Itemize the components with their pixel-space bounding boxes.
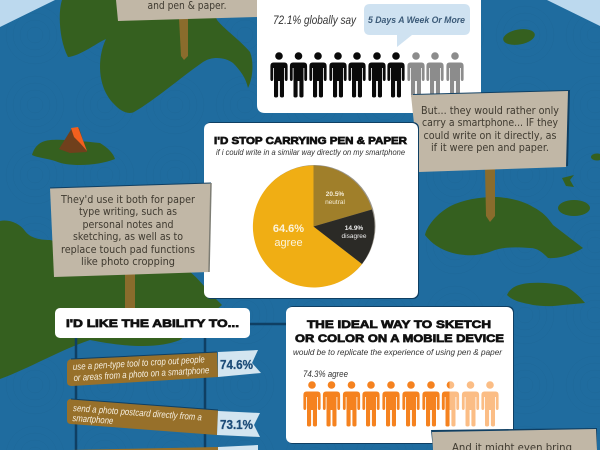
slice: disagree [314, 210, 375, 264]
panel: ideal way to sketch [286, 306, 514, 444]
sign: both uses: like photo cropping [81, 256, 175, 268]
sign: both uses: sketching, as well as to [73, 231, 183, 243]
top-left ice corner [0, 0, 55, 27]
heading panel: ability [55, 308, 250, 338]
sign post: top [179, 18, 188, 60]
sign: both uses: type writing, such as [79, 206, 177, 218]
tag: 74.6%: 74.6% [220, 357, 253, 372]
stat text: 74.3% agree [303, 369, 348, 380]
ribbon: postcard [67, 399, 218, 435]
pictogram: people [270, 52, 464, 98]
sign: both uses: personal notes and [82, 219, 174, 231]
pie labels: neutral [325, 199, 345, 206]
sign post: right [485, 168, 495, 222]
sign: top: and pen & paper. [148, 0, 226, 12]
pie labels: 20.5% [326, 191, 344, 198]
ribbon: crop: use a pen-type tool to crop out people [73, 354, 205, 373]
heading: I'D STOP CARRYING PEN & PAPER [214, 136, 408, 147]
sign: both uses: replace touch pad functions [61, 244, 195, 256]
heading: THE IDEAL WAY TO SKETCH [307, 319, 491, 331]
panel: pie chart [204, 122, 419, 299]
heading panel: ability: I'D LIKE THE ABILITY TO... [66, 318, 239, 330]
stat text: 72.1% globally say [273, 15, 357, 27]
sign: both uses: They'd use it both for paper [60, 194, 196, 206]
sign: rather carry a smartphone: if it were pen and paper. [431, 142, 549, 154]
sign: rather carry a smartphone [411, 90, 570, 172]
sign: rather carry a smartphone: could write on it directly, as [424, 130, 556, 142]
sign: bottom [431, 428, 597, 450]
sign: both uses [50, 183, 211, 277]
left continent [0, 221, 222, 379]
sign: rather carry a smartphone: But... they would rather only [421, 105, 559, 117]
ribbon: postcard: smartphone [72, 413, 114, 427]
top-right ice corner [547, 0, 600, 26]
ribbon: crop: or areas from a photo on a smartphone [73, 365, 210, 384]
tag: 74.6% [218, 350, 261, 377]
ribbon: next item [70, 447, 218, 450]
right island [425, 197, 583, 258]
panel: 5 days a week [257, 0, 481, 113]
ribbon: postcard: send a photo postcard directly from a [73, 403, 202, 423]
top continent [60, 0, 252, 113]
pie labels: 64.6% [273, 223, 304, 235]
pie chart [253, 165, 376, 287]
sign post: left [125, 270, 135, 310]
pie labels: 14.9% [345, 225, 363, 232]
subheading: would be to replicate the experience of using pen & paper [293, 347, 503, 357]
tag: 73.1% [217, 411, 260, 437]
heading: OR COLOR ON A MOBILE DEVICE [295, 333, 504, 345]
pie labels: agree [274, 237, 303, 249]
speech bubble: 5 Days A Week Or More [368, 15, 466, 26]
speech bubble [364, 4, 470, 47]
tag: next item [218, 445, 258, 450]
heading [295, 319, 504, 345]
ribbon: crop [67, 352, 218, 386]
pie labels: disagree [342, 233, 367, 240]
rope lines [76, 324, 287, 450]
slice: neutral [314, 166, 372, 226]
small islands [502, 27, 600, 306]
sign: rather carry a smartphone: carry a smartphone... IF they [422, 117, 558, 129]
pictogram: orange people [303, 381, 499, 426]
subheading: if i could write in a similar way directly on my smartphone [216, 147, 405, 157]
slice: agree [253, 166, 362, 287]
tag: 73.1%: 73.1% [220, 417, 253, 432]
sign: top [116, 0, 258, 21]
volcano island [32, 127, 115, 165]
pie labels [273, 191, 367, 249]
